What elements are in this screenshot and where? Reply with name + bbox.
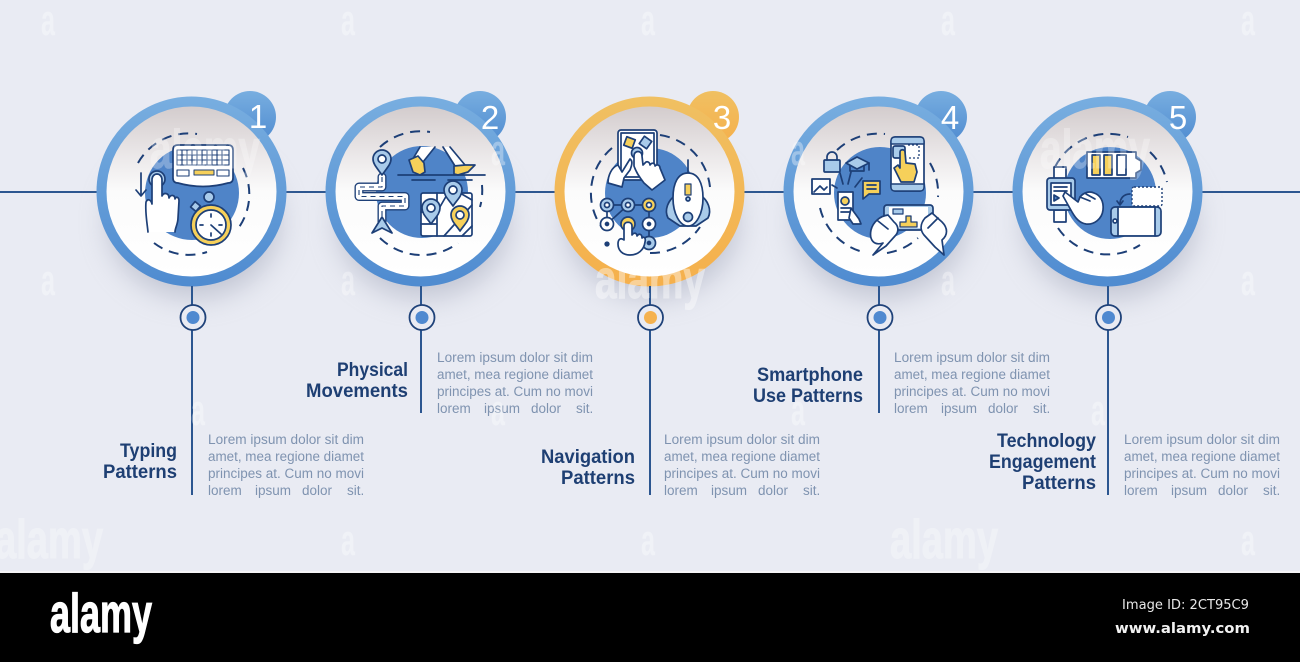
text block: step 3: ipsum <box>711 483 747 498</box>
panel: step 3 navigation patterns <box>554 91 744 298</box>
text block: step 3 <box>664 432 820 498</box>
heading: physical movements <box>306 360 408 402</box>
text block: step 5: Lorem ipsum dolor sit dim <box>1124 432 1280 447</box>
text block: step 3: Lorem ipsum dolor sit dim <box>664 432 820 447</box>
icon: keyboard hand and stopwatch <box>136 133 249 255</box>
connector and node 4 <box>868 286 892 413</box>
watermarks: a <box>341 516 355 565</box>
circle badge 5 <box>1012 91 1202 298</box>
text block: step 1: principes at. Cum no movi <box>208 466 364 481</box>
watermarks: a <box>191 386 205 435</box>
heading: smartphone use patterns <box>753 365 863 407</box>
heading: technology engagement patterns: Engagement <box>989 452 1097 473</box>
text block: step 4: dolor <box>988 401 1019 416</box>
text block: step 4: principes at. Cum no movi <box>894 384 1050 399</box>
heading: smartphone use patterns: Use Patterns <box>753 386 863 407</box>
text block: step 3: lorem <box>664 483 698 498</box>
circle badge 3 <box>554 91 744 298</box>
text block: step 2: amet, mea regione diamet <box>437 367 593 382</box>
connector and node 2 <box>410 286 434 413</box>
watermarks: alamy <box>595 248 705 310</box>
icon: smartphones, apps and game controls <box>812 134 946 255</box>
text block: step 1: ipsum <box>255 483 291 498</box>
text block: step 2 <box>437 350 593 416</box>
footer image id: Image ID: 2CT95C9 <box>1122 597 1249 613</box>
heading: technology engagement patterns: Technology <box>997 431 1096 452</box>
connector and node 3 <box>638 286 663 495</box>
circle badge 2 <box>326 91 516 298</box>
heading: navigation patterns <box>541 447 635 489</box>
circle badge 1: 1 <box>249 98 267 135</box>
text block: step 5: amet, mea regione diamet <box>1124 449 1280 464</box>
footer url: www.alamy.com <box>1115 621 1250 637</box>
text block: step 2: lorem <box>437 401 471 416</box>
icon: tablet, mouse and gesture pattern <box>591 130 710 255</box>
connector and node 5 <box>1096 286 1121 495</box>
text block: step 4: sit. <box>1033 401 1050 416</box>
watermarks: a <box>791 126 805 175</box>
watermarks: a <box>1091 386 1105 435</box>
text block: step 4: amet, mea regione diamet <box>894 367 1050 382</box>
text block: step 5: dolor <box>1218 483 1249 498</box>
circle badge 1 <box>96 91 286 298</box>
text block: step 1: sit. <box>347 483 364 498</box>
text block: step 4: Lorem ipsum dolor sit dim <box>894 350 1050 365</box>
watermarks: a <box>1241 516 1255 565</box>
watermarks: a <box>1241 256 1255 305</box>
panel: step 5 technology engagement patterns <box>1012 91 1202 298</box>
watermarks: alamy <box>1040 118 1150 180</box>
text block: step 5 <box>1124 432 1280 498</box>
text block: step 1: amet, mea regione diamet <box>208 449 364 464</box>
text block: step 2: principes at. Cum no movi <box>437 384 593 399</box>
horizontal timeline line <box>0 191 1300 193</box>
text block: step 4 <box>894 350 1050 416</box>
heading: navigation patterns: Patterns <box>561 468 635 489</box>
text block: step 1: dolor <box>302 483 333 498</box>
footer bar <box>0 571 1300 662</box>
text block: step 1: Lorem ipsum dolor sit dim <box>208 432 364 447</box>
text block: step 5: lorem <box>1124 483 1158 498</box>
footer logo: alamy <box>50 582 152 644</box>
text block: step 2: dolor <box>531 401 562 416</box>
icon: route, legs and map <box>359 131 485 255</box>
text block: step 1: lorem <box>208 483 242 498</box>
text block: step 5: sit. <box>1263 483 1280 498</box>
heading: typing patterns <box>103 441 177 483</box>
heading: physical movements: Physical <box>337 360 408 381</box>
circle badge 5: 5 <box>1169 99 1187 136</box>
circle badge 4: 4 <box>941 99 959 136</box>
watermarks: alamy <box>890 508 998 570</box>
watermarks: a <box>341 256 355 305</box>
circle badge 3: 3 <box>713 99 731 136</box>
watermarks: a <box>941 256 955 305</box>
text block: step 3: dolor <box>758 483 789 498</box>
watermarks: a <box>791 386 805 435</box>
connector and node 1 <box>180 286 206 495</box>
heading: typing patterns: Patterns <box>103 462 177 483</box>
heading: physical movements: Movements <box>306 381 408 402</box>
text block: step 2: ipsum <box>484 401 520 416</box>
heading: smartphone use patterns: Smartphone <box>757 365 863 386</box>
panel: step 1 typing patterns <box>96 91 286 298</box>
heading: technology engagement patterns <box>989 431 1097 494</box>
text block: step 5: principes at. Cum no movi <box>1124 466 1280 481</box>
text block: step 4: ipsum <box>941 401 977 416</box>
watermarks: a <box>491 386 505 435</box>
icon: battery, smartwatch and rotating phone <box>1047 134 1167 254</box>
text block: step 3: sit. <box>803 483 820 498</box>
watermarks: a <box>641 516 655 565</box>
panel: step 4 smartphone use patterns <box>784 91 974 298</box>
text block: step 5: ipsum <box>1171 483 1207 498</box>
watermarks: a <box>491 126 505 175</box>
heading: typing patterns: Typing <box>120 441 177 462</box>
heading: technology engagement patterns: Patterns <box>1022 473 1096 494</box>
watermarks: alamy <box>150 118 260 180</box>
heading: navigation patterns: Navigation <box>541 447 635 468</box>
text block: step 4: lorem <box>894 401 928 416</box>
watermarks: a <box>41 256 55 305</box>
circle badge 2: 2 <box>481 99 499 136</box>
text block: step 3: principes at. Cum no movi <box>664 466 820 481</box>
panel: step 2 physical movements <box>326 91 516 298</box>
text block: step 2: Lorem ipsum dolor sit dim <box>437 350 593 365</box>
circle badge 4 <box>784 91 974 298</box>
text block: step 1 <box>208 432 364 498</box>
text block: step 3: amet, mea regione diamet <box>664 449 820 464</box>
text block: step 2: sit. <box>576 401 593 416</box>
